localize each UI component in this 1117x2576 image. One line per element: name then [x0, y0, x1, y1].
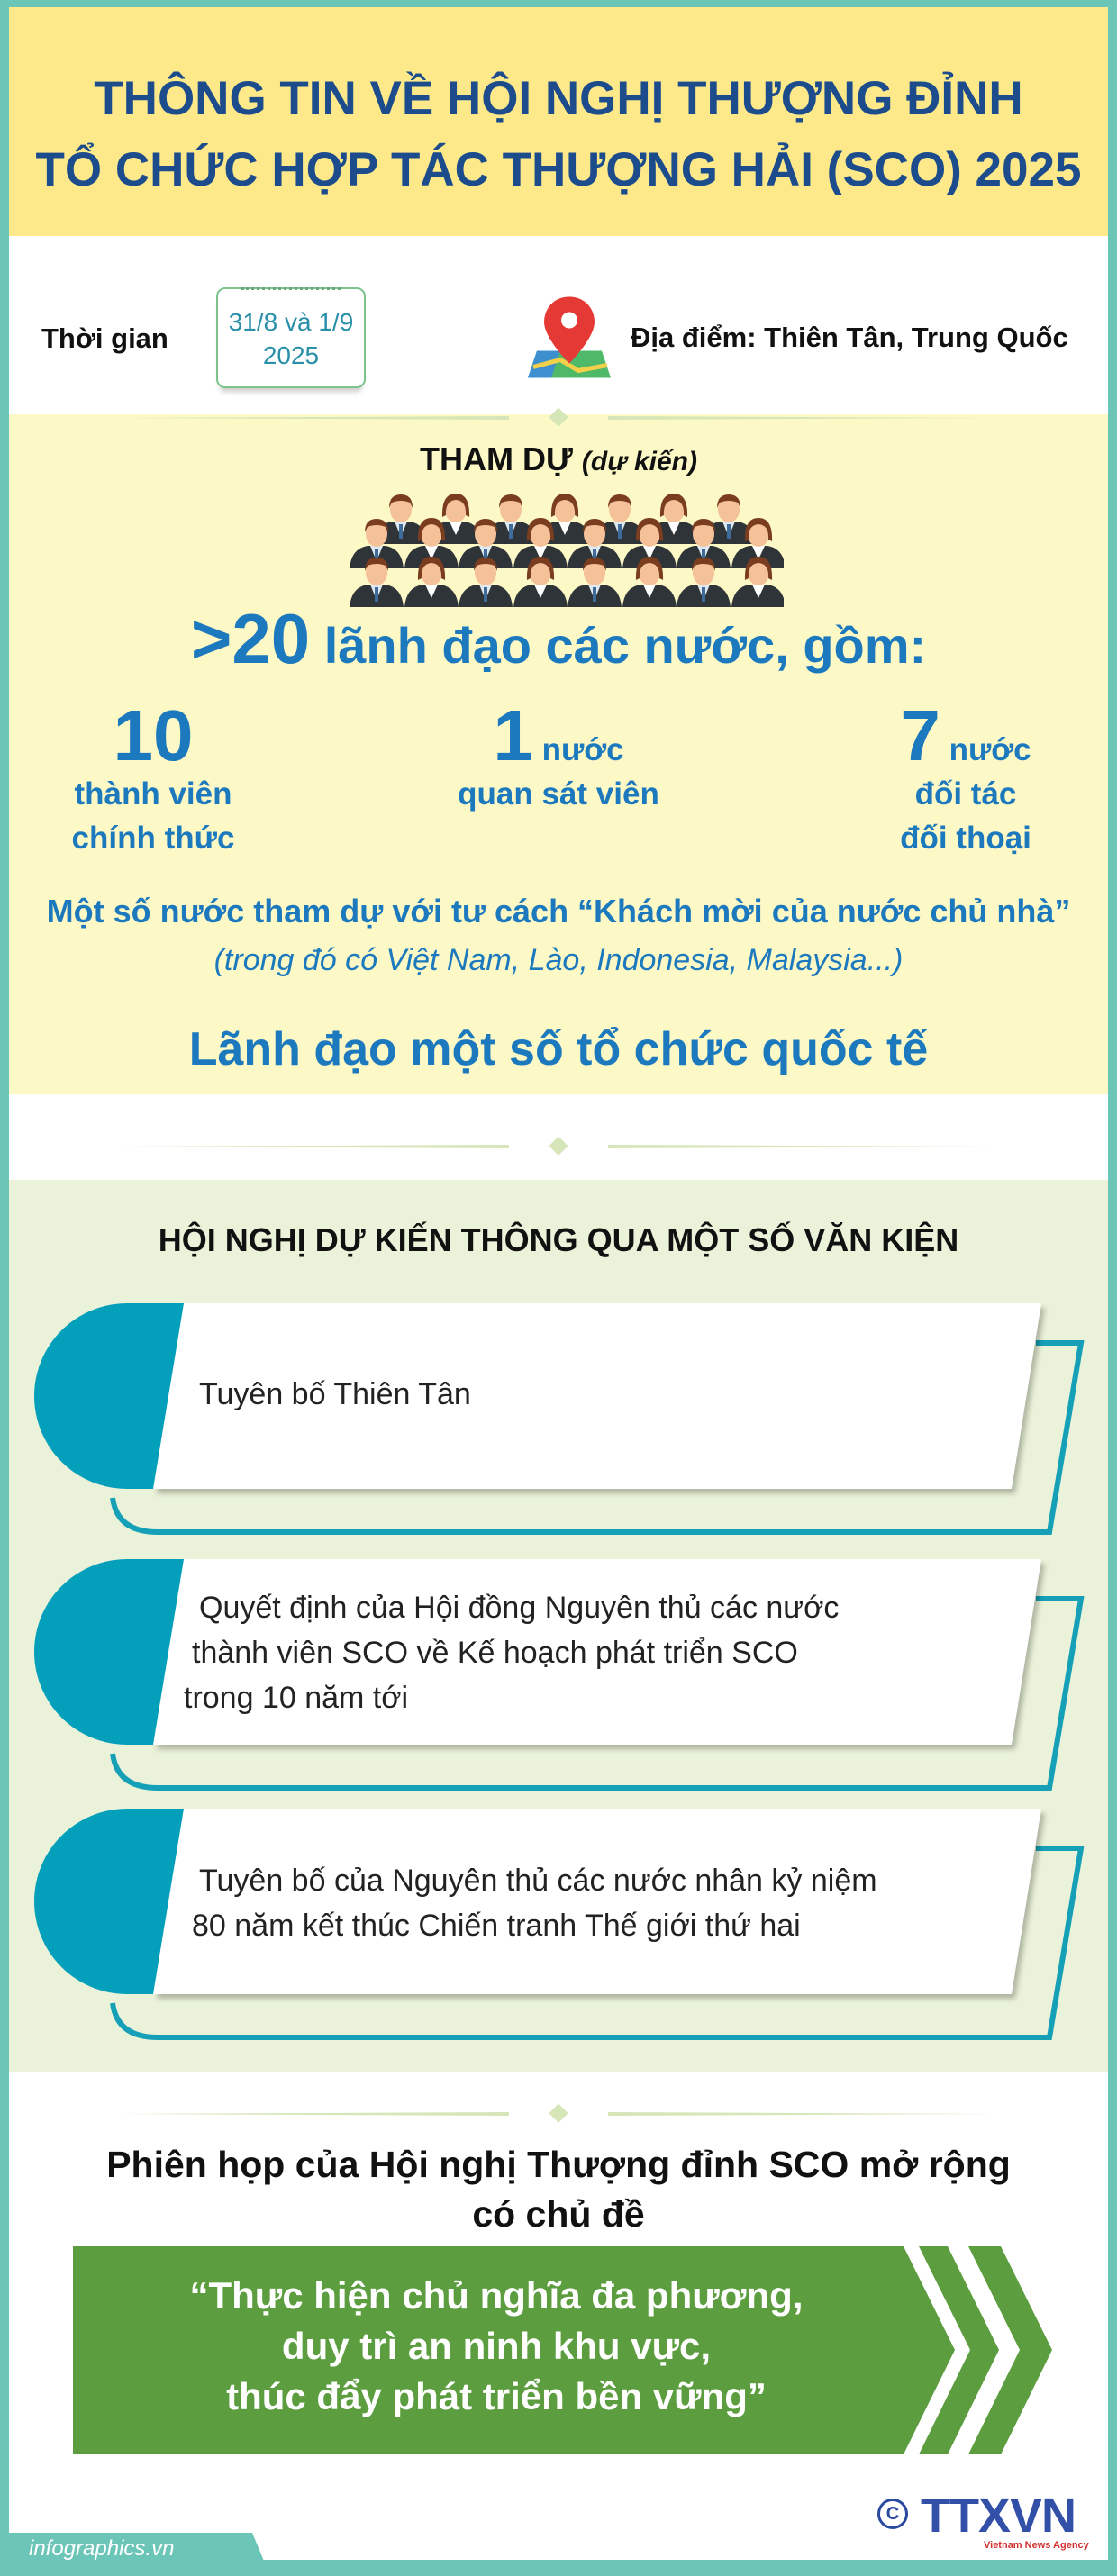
calendar box: 31/8 và 1/9 — [229, 308, 353, 336]
calendar box: 2025 — [263, 341, 319, 369]
card 1 — [34, 1303, 1085, 1535]
time label: Thời gian — [41, 322, 168, 354]
title band — [9, 7, 1108, 236]
card 2 text — [184, 1591, 839, 1715]
logo: TTXVN: C — [886, 2504, 899, 2524]
card 3 — [34, 1809, 1085, 2040]
stat: 1 observer: quan sát viên — [458, 776, 659, 812]
logo: TTXVN — [877, 2489, 1089, 2551]
divider middle — [128, 1137, 985, 1156]
stat: 1 observer — [458, 695, 659, 812]
card 2 — [34, 1559, 1085, 1791]
footer: source: infographics.vn — [29, 2536, 174, 2561]
icon: map pin — [528, 297, 611, 378]
stat: 1 observer: 1 nước — [493, 695, 624, 776]
headline: >20 leaders: >20 lãnh đạo các nước, gồm: — [191, 599, 926, 678]
card 2 text: trong 10 năm tới — [184, 1681, 408, 1715]
stat: 7 dialogue partners: đối tác — [915, 776, 1016, 812]
card 3 text: Tuyên bố của Nguyên thủ các nước nhân kỷ niệm — [199, 1864, 877, 1898]
card 2 text: thành viên SCO về Kế hoạch phát triển SCO — [192, 1636, 798, 1670]
card 3 text: 80 năm kết thúc Chiến tranh Thế giới thứ hai — [192, 1909, 801, 1943]
heading: tham du: THAM DỰ (dự kiến) — [420, 440, 697, 477]
logo: TTXVN: Vietnam News Agency — [984, 2540, 1089, 2551]
icon: group of people — [350, 494, 784, 607]
text: guest countries: Một số nước tham dự với tư cách “Khách mời của nước chủ nhà” — [47, 893, 1070, 930]
heading: expanded session: Phiên họp của Hội nghị Thượng đỉnh SCO mở rộng — [106, 2144, 1011, 2185]
heading: expanded session: có chủ đề — [472, 2193, 645, 2235]
banner text: “Thực hiện chủ nghĩa đa phương, — [189, 2274, 804, 2317]
stat: 10 members — [72, 695, 234, 856]
stat: 10 members: chính thức — [72, 821, 234, 856]
banner: theme — [73, 2246, 1052, 2454]
banner arrows — [73, 2246, 1052, 2454]
card 3 text — [192, 1864, 877, 1943]
banner text: thúc đẩy phát triển bền vững” — [226, 2375, 767, 2417]
logo: TTXVN: TTXVN — [921, 2489, 1076, 2543]
stat: 7 dialogue partners: đối thoại — [900, 821, 1031, 856]
stat: 10 members: thành viên — [74, 776, 232, 812]
divider bottom — [128, 2104, 985, 2123]
banner text — [189, 2274, 804, 2417]
title — [36, 72, 1081, 196]
stat: 7 dialogue partners — [900, 695, 1031, 856]
stat: 10 members: 10 — [114, 695, 193, 776]
text: guest examples: (trong đó có Việt Nam, Lào, Indonesia, Malaysia...) — [214, 943, 903, 977]
footer tab — [9, 2533, 263, 2560]
panel: documents — [9, 1180, 1108, 2072]
title: THÔNG TIN VỀ HỘI NGHỊ THƯỢNG ĐỈNH — [94, 72, 1023, 125]
heading: documents: HỘI NGHỊ DỰ KIẾN THÔNG QUA MỘT SỐ VĂN KIỆN — [159, 1221, 958, 1258]
card 1 text: Tuyên bố Thiên Tân — [199, 1377, 471, 1411]
location text: Địa điểm: Thiên Tân, Trung Quốc — [631, 322, 1068, 353]
heading: expanded session — [106, 2144, 1011, 2235]
card 2 text: Quyết định của Hội đồng Nguyên thủ các nước — [199, 1591, 839, 1625]
divider top — [136, 408, 976, 427]
text: international orgs: Lãnh đạo một số tổ chức quốc tế — [189, 1023, 928, 1075]
calendar box — [216, 287, 366, 388]
title: TỔ CHỨC HỢP TÁC THƯỢNG HẢI (SCO) 2025 — [36, 143, 1081, 196]
panel: attendance — [9, 414, 1108, 1094]
stat: 7 dialogue partners: 7 nước — [900, 695, 1031, 776]
banner text: duy trì an ninh khu vực, — [282, 2325, 711, 2367]
